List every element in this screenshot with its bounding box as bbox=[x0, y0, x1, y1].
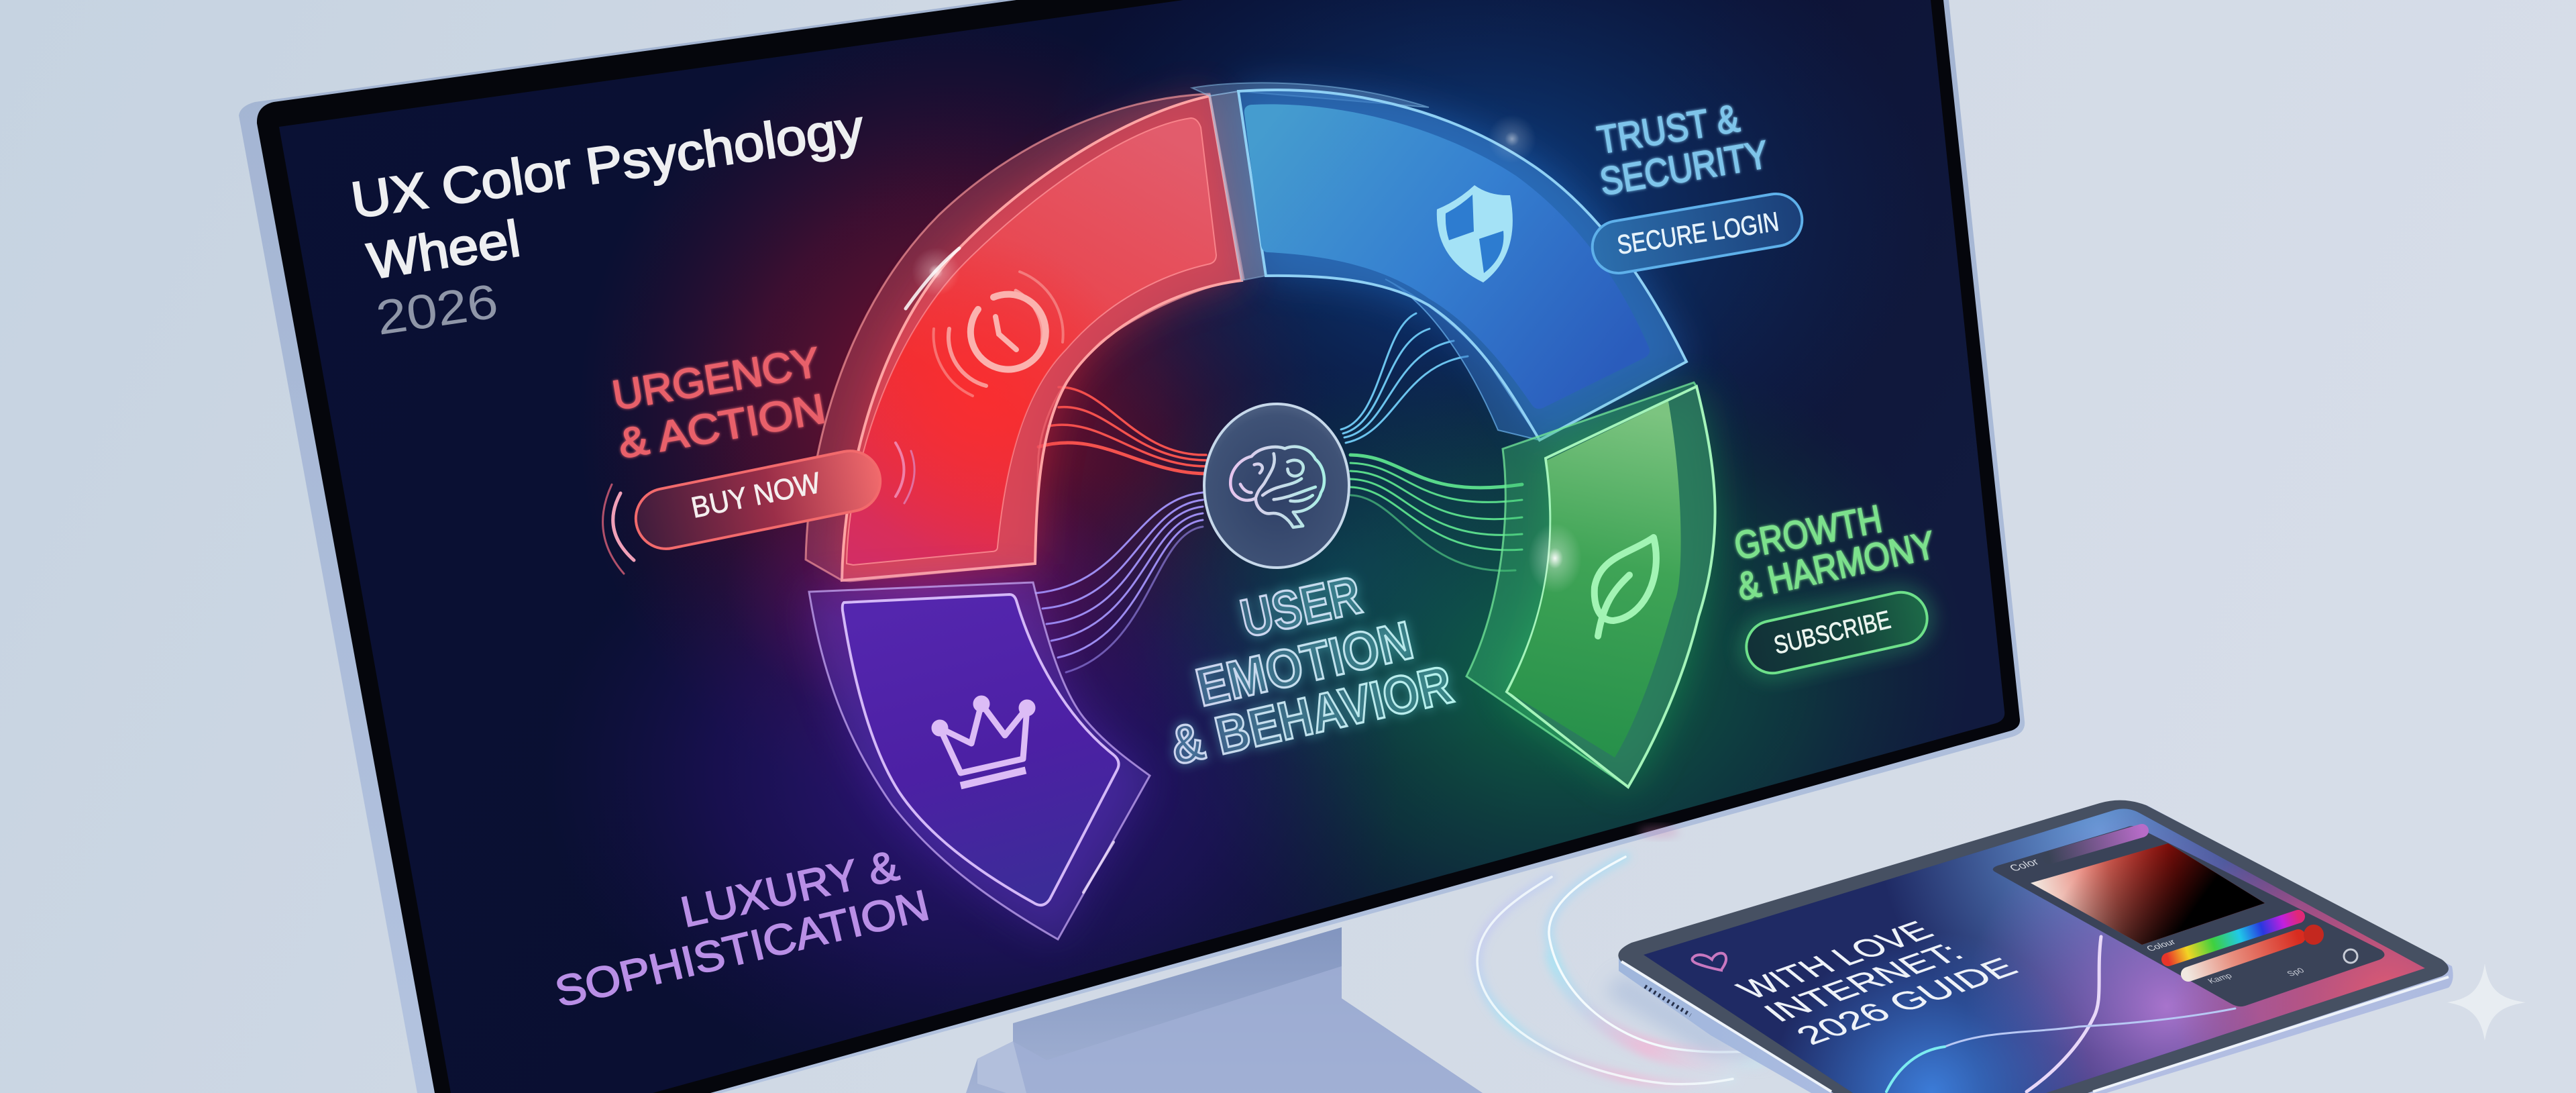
purple strands bbox=[1036, 492, 1203, 672]
top strip bbox=[2049, 831, 2142, 857]
red glass body bbox=[806, 94, 1244, 581]
heading bbox=[1595, 97, 1772, 204]
green glass body bbox=[1466, 382, 1697, 787]
icon: clock bbox=[934, 272, 1063, 396]
panel label: Color bbox=[2006, 857, 2042, 874]
center brain node bbox=[1204, 404, 1349, 568]
purple glass body bbox=[809, 582, 1150, 939]
wheel segment: growth (green) bbox=[1466, 382, 1715, 787]
callout: trust & security bbox=[1589, 97, 1806, 277]
highlight streak bbox=[906, 248, 959, 309]
tablet screen bbox=[1637, 798, 2442, 1093]
saturation square bbox=[2031, 843, 2265, 945]
screen bbox=[268, 0, 2026, 1093]
monitor bbox=[239, 0, 2026, 1093]
wheel segment: urgency (red) bbox=[806, 94, 1244, 581]
green glow bbox=[1507, 386, 1715, 787]
icon: leaf bbox=[1595, 537, 1656, 636]
icon: shield bbox=[1437, 185, 1513, 282]
small controls: Kamp bbox=[2206, 972, 2234, 985]
highlight bbox=[1528, 523, 1582, 593]
icon: brain bbox=[1230, 447, 1324, 527]
green strands bbox=[1350, 455, 1522, 571]
callout: growth & harmony bbox=[1731, 497, 1939, 678]
button glow bbox=[1741, 587, 1932, 678]
speaker grille bbox=[1645, 986, 1690, 1015]
purple inner fill bbox=[843, 594, 1119, 905]
icon: crown bbox=[934, 698, 1032, 786]
screen wave lines bbox=[1886, 937, 2235, 1092]
icon: sparkle watermark bbox=[2447, 964, 2526, 1041]
center label: user emotion & behavior: EMOTION bbox=[1191, 610, 1418, 718]
button label: SUBSCRIBE bbox=[1772, 606, 1893, 660]
title: UX Color Psychology bbox=[347, 99, 867, 229]
small controls bbox=[2206, 949, 2357, 985]
green inner fill bbox=[1508, 401, 1681, 758]
monitor silver frame bbox=[239, 0, 2025, 1093]
highlight streak bbox=[1083, 842, 1114, 892]
color knob bbox=[2304, 925, 2324, 945]
blue inner fill bbox=[1244, 104, 1650, 409]
tablet title: WITH LOVE bbox=[1729, 916, 1941, 1004]
hot centre bbox=[847, 118, 1216, 565]
button label: SECURE LOGIN bbox=[1615, 207, 1781, 260]
node circle bbox=[1204, 404, 1349, 568]
blue front face bbox=[1238, 90, 1686, 440]
slider label: Colour bbox=[2144, 937, 2178, 953]
button: buy now bbox=[631, 446, 885, 554]
callout: urgency & action bbox=[603, 339, 914, 574]
rings bbox=[603, 443, 914, 574]
tablet bbox=[1603, 798, 2453, 1093]
neural strands bbox=[1036, 313, 1522, 672]
heading: TRUST & bbox=[1595, 97, 1742, 162]
color picker panel bbox=[1993, 826, 2385, 1006]
tablet title bbox=[1729, 916, 2026, 1050]
callout: luxury & sophistication: SOPHISTICATION bbox=[551, 880, 934, 1017]
tablet title: INTERNET: bbox=[1756, 937, 1972, 1027]
heading bbox=[609, 339, 829, 468]
blue glass body bbox=[1192, 83, 1429, 107]
highlight bbox=[1488, 115, 1536, 163]
tablet title: 2026 GUIDE bbox=[1788, 953, 2026, 1050]
button: subscribe bbox=[1741, 587, 1932, 678]
center label: user emotion & behavior: & BEHAVIOR bbox=[1165, 654, 1458, 776]
tablet shadow bbox=[1603, 973, 1771, 1060]
cable glow bbox=[1477, 857, 1760, 1084]
rainbow cable bbox=[1477, 857, 1760, 1084]
icon: heart bbox=[1693, 953, 1726, 970]
small controls: Sp0 bbox=[2285, 966, 2306, 978]
center label: user emotion & behavior bbox=[1165, 565, 1458, 776]
center label: user emotion & behavior: USER bbox=[1236, 565, 1366, 649]
button label: BUY NOW bbox=[688, 466, 824, 525]
heading: & ACTION bbox=[614, 386, 829, 468]
cable lines bbox=[1477, 857, 1749, 1084]
button: secure login bbox=[1589, 190, 1806, 277]
title bbox=[347, 99, 867, 346]
hue slider bbox=[2168, 917, 2298, 959]
title: 2026 bbox=[373, 274, 501, 346]
title: Wheel bbox=[364, 210, 524, 291]
purple glow bbox=[809, 582, 1150, 939]
red strands bbox=[1038, 387, 1206, 474]
heading: GROWTH bbox=[1731, 497, 1885, 568]
blue strands bbox=[1341, 313, 1468, 443]
value slider bbox=[2188, 937, 2298, 974]
tablet edge highlight bbox=[1621, 961, 2449, 1092]
red front face bbox=[842, 96, 1242, 580]
tablet body bbox=[1619, 805, 2453, 1093]
heading: URGENCY bbox=[609, 339, 823, 419]
highlight bbox=[912, 248, 960, 296]
heading: & HARMONY bbox=[1733, 523, 1939, 609]
red glow bbox=[842, 96, 1242, 580]
monitor stand bbox=[966, 927, 1483, 1093]
wheel segment: trust (blue) bbox=[1192, 83, 1686, 440]
callout: luxury & sophistication: LUXURY & bbox=[676, 841, 903, 937]
heading: SECURITY bbox=[1597, 133, 1772, 204]
blue glow bbox=[1238, 90, 1686, 440]
monitor black bezel bbox=[257, 0, 2020, 1093]
tablet bezel bbox=[1618, 800, 2449, 1093]
red inner fill bbox=[847, 118, 1216, 565]
green front face bbox=[1507, 386, 1715, 787]
wheel segment: luxury (purple) bbox=[809, 582, 1150, 939]
reflected glow on bezel bbox=[1639, 826, 1679, 838]
